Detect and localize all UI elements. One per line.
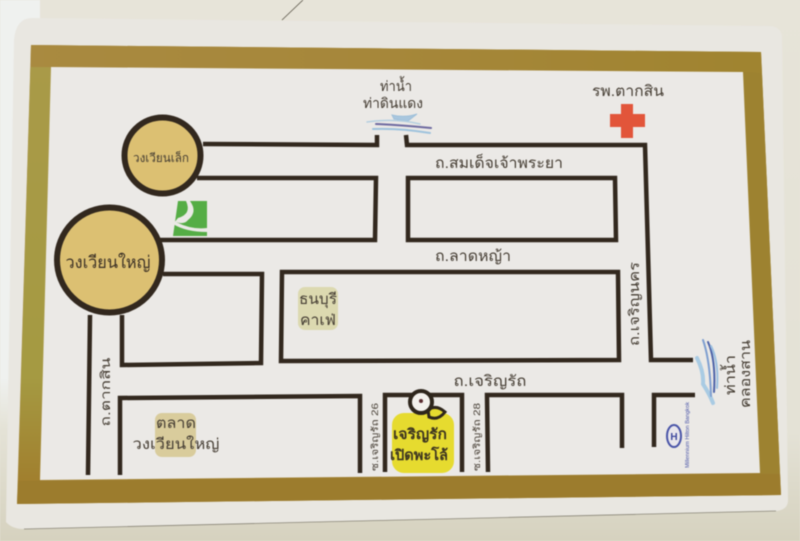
icon: boat on water	[367, 114, 431, 133]
pier label: tha nam tha din daeng: ท่าดินแดง	[363, 95, 423, 111]
scratch line	[282, 0, 303, 20]
destination: charoen rak duck restaurant	[390, 413, 454, 473]
landmark: wongwian yai market	[132, 413, 220, 457]
road network	[88, 135, 695, 475]
road label: taksin: ถ.ตากสิน	[98, 357, 113, 426]
icon: hilton logo: Millennium Hilton Bangkok	[685, 401, 691, 468]
road label: lat ya: ถ.ลาดหญ้า	[435, 248, 511, 265]
road label: charoen rat: ถ.เจริญรัถ	[454, 373, 526, 390]
pier label: khlong san	[720, 340, 753, 408]
destination: charoen rak duck restaurant: เปิดพะโล้	[390, 446, 448, 464]
map paper	[40, 67, 760, 480]
destination: charoen rak duck restaurant: เจริญรัก	[393, 426, 447, 443]
icon: river	[697, 340, 717, 403]
landmark: thonburi cafe	[298, 287, 338, 330]
pier label: tha nam tha din daeng: ท่าน้ำ	[380, 76, 412, 94]
road label: charoen nakhon: ถ.เจริญนคร	[626, 261, 642, 346]
road label: somdet chao phraya: ถ.สมเด็จเจ้าพระยา	[435, 153, 563, 172]
landmark: thonburi cafe: คาเฟ่	[300, 312, 336, 329]
big roundabout	[57, 208, 162, 312]
icon: location pin	[410, 391, 445, 418]
landmark: wongwian yai market: ตลาด	[156, 415, 196, 432]
hospital label: รพ.ตากสิน	[592, 83, 664, 100]
pier label: khlong san: คลองสาน	[737, 340, 753, 408]
small roundabout	[124, 118, 200, 194]
big roundabout: วงเวียนใหญ่	[66, 252, 150, 272]
left background	[0, 0, 40, 430]
small roundabout: วงเวียนเล็ก	[133, 150, 189, 165]
pier label: khlong san: ท่าน้ำ	[720, 355, 738, 395]
landmark: wongwian yai market: วงเวียนใหญ่	[132, 435, 220, 453]
landmark: thonburi cafe: ธนบุรี	[299, 291, 337, 309]
icon: red cross	[610, 104, 645, 138]
icon: hilton logo	[667, 401, 691, 468]
soi label 28: ซ.เจริญรัถ 28	[472, 403, 483, 471]
icon: hilton logo: H	[670, 432, 678, 443]
card bottom edge	[24, 511, 776, 529]
soi label 26: ซ.เจริญรัถ 26	[370, 403, 381, 471]
icon: green hotel logo	[173, 201, 207, 236]
pier label: tha nam tha din daeng	[363, 76, 423, 111]
